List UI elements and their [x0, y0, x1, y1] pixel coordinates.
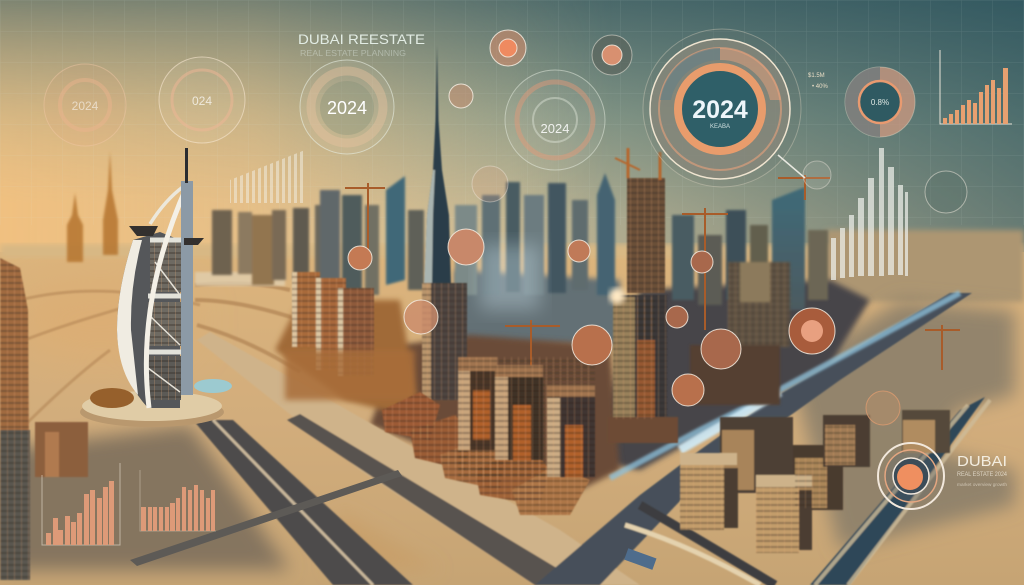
road light streak [610, 293, 960, 478]
title text: DUBAI REESTATE [298, 32, 425, 47]
main ring: 2024 [643, 29, 801, 187]
bar chart: bottom left one [42, 463, 120, 545]
small note text [808, 73, 828, 90]
mid-ground shaded district [275, 270, 870, 500]
hazy skyline [212, 173, 828, 310]
small note text: • 40% [812, 84, 828, 90]
ring: faded 2024 [44, 64, 126, 146]
hatch chart [230, 150, 305, 203]
bar chart: bottom left two [140, 470, 216, 531]
ring: center 2024: 2024 [541, 121, 569, 136]
truck [624, 548, 656, 570]
bar chart: white bars [831, 148, 908, 280]
title text [298, 32, 425, 58]
Dubai label: market overview growth [957, 482, 1008, 487]
ring: faded 2024: 2024 [72, 99, 99, 113]
Dubai label: REAL ESTATE 2024 [957, 472, 1008, 478]
beige apartment blocks [680, 410, 950, 553]
ring: right donut [845, 67, 915, 137]
orange tower cluster [285, 272, 467, 400]
light beam glow [480, 245, 540, 310]
title text: REAL ESTATE PLANNING [300, 49, 406, 58]
desert shadows [0, 300, 1015, 570]
hotel sail [117, 148, 204, 408]
small rings [348, 30, 967, 425]
far towers left [67, 151, 118, 262]
ring: 2024: 2024 [327, 98, 367, 118]
ring: faded 024: 024 [192, 94, 212, 108]
stepped low-rise row [382, 392, 590, 515]
construction tower [615, 148, 665, 293]
bar chart: top right [940, 50, 1012, 124]
central high-rise [608, 288, 678, 443]
pointer line [778, 155, 805, 178]
Dubai label [957, 453, 1008, 487]
main ring: 2024: KEABA [710, 124, 730, 130]
mid-right blocks [690, 262, 790, 405]
Burj Al Arab hotel [80, 148, 232, 427]
ring: faded 024 [159, 57, 245, 143]
small note text: $1.5M [808, 73, 825, 79]
Dubai label: DUBAI [957, 453, 1007, 470]
left foreground tower [0, 258, 30, 580]
flyover [130, 470, 402, 566]
ring: right donut: 0.8% [871, 98, 889, 107]
ring: center 2024 [505, 70, 605, 170]
hotel base [80, 379, 232, 427]
ring: 2024 [300, 60, 394, 154]
front brick towers [458, 357, 595, 477]
cranes [345, 175, 960, 370]
target icon: Dubai badge [878, 443, 944, 509]
Burj Khalifa [424, 45, 451, 285]
highways [193, 293, 990, 585]
sky background [0, 0, 1024, 252]
small low building [35, 422, 88, 477]
main ring: 2024: 2024 [692, 96, 748, 124]
desert ground [0, 230, 1024, 585]
